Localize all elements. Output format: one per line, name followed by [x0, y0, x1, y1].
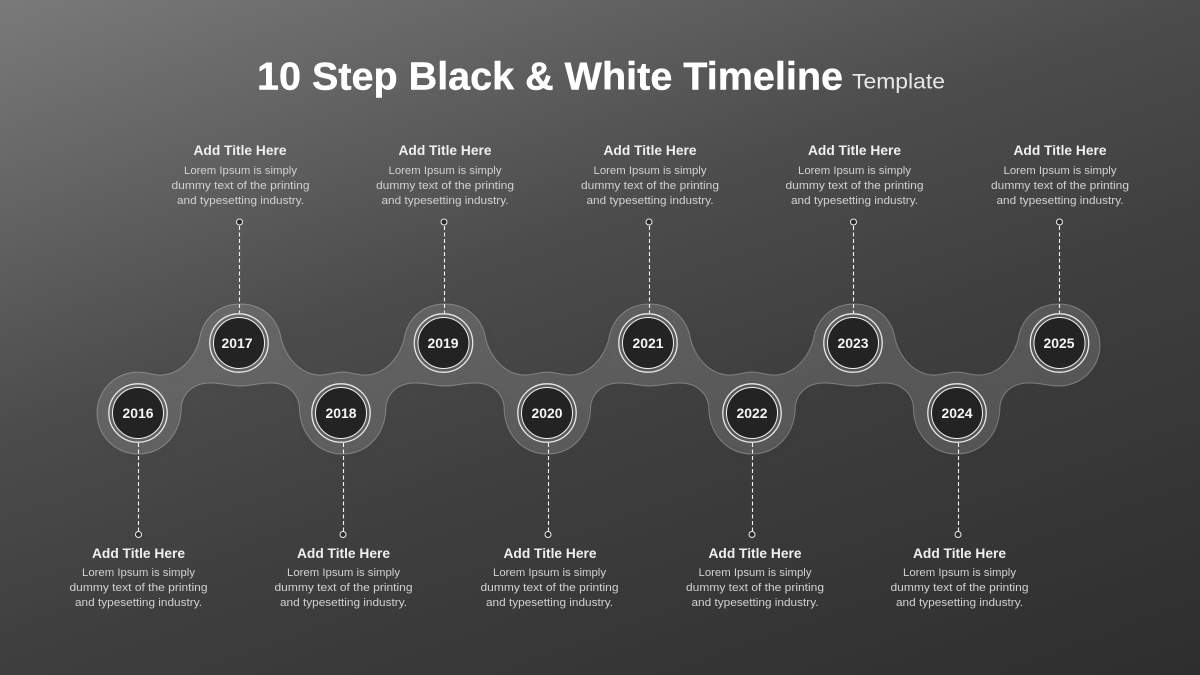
step: 2016: dummy text of the printing: [70, 582, 208, 594]
step: 2017: [172, 142, 310, 372]
step: 2023: [786, 142, 924, 372]
step: 2022: 2022: [736, 406, 768, 421]
step: 2020: and typesetting industry.: [486, 597, 613, 609]
step: 2021: Add Title Here: [604, 142, 697, 158]
step: 2025: [991, 142, 1129, 372]
step: 2019: Add Title Here: [398, 142, 492, 158]
step: 2019: 2019: [428, 336, 458, 351]
step: 2017: Lorem Ipsum is simply: [184, 165, 298, 177]
step: 2022: Add Title Here: [708, 545, 802, 561]
title: 10 Step Black & White Timeline: [257, 56, 843, 98]
step: 2019: and typesetting industry.: [382, 195, 508, 207]
step: 2019: [376, 142, 514, 372]
step: 2021: [581, 142, 719, 372]
step: 2025: and typesetting industry.: [996, 195, 1124, 207]
step: 2023: 2023: [838, 336, 869, 351]
step: 2016: 2016: [122, 406, 154, 421]
step: 2023: dummy text of the printing: [786, 180, 924, 192]
step: 2020: 2020: [532, 406, 562, 421]
timeline band: [97, 304, 1100, 454]
step: 2021: 2021: [632, 336, 664, 351]
step: 2017: Add Title Here: [194, 142, 287, 158]
step: 2018: dummy text of the printing: [274, 582, 412, 594]
step: 2019: dummy text of the printing: [376, 180, 514, 192]
step: 2016: Lorem Ipsum is simply: [82, 567, 196, 579]
step: 2024: Add Title Here: [913, 545, 1006, 561]
step: 2020: Lorem Ipsum is simply: [493, 567, 607, 579]
step: 2025: 2025: [1044, 336, 1075, 351]
step: 2021: and typesetting industry.: [586, 195, 714, 207]
step: 2022: [686, 384, 824, 609]
step: 2020: [480, 384, 618, 609]
step: 2024: dummy text of the printing: [890, 582, 1028, 594]
step: 2023: Add Title Here: [808, 142, 901, 158]
step: 2024: [890, 384, 1028, 609]
step: 2024: Lorem Ipsum is simply: [903, 567, 1017, 579]
step: 2018: [274, 384, 412, 609]
step: 2025: Add Title Here: [1014, 142, 1107, 158]
step: 2016: Add Title Here: [92, 545, 185, 561]
step: 2024: 2024: [942, 406, 973, 421]
step: 2019: Lorem Ipsum is simply: [388, 165, 502, 177]
step: 2021: Lorem Ipsum is simply: [594, 165, 707, 177]
step: 2025: Lorem Ipsum is simply: [1004, 165, 1117, 177]
step: 2017: and typesetting industry.: [177, 195, 304, 207]
step: 2018: 2018: [326, 406, 357, 421]
step: 2018: and typesetting industry.: [280, 597, 407, 609]
step: 2022: Lorem Ipsum is simply: [698, 567, 812, 579]
title: Template: [852, 70, 945, 94]
step: 2018: Lorem Ipsum is simply: [287, 567, 401, 579]
step: 2020: Add Title Here: [504, 545, 597, 561]
step: 2016: and typesetting industry.: [75, 597, 202, 609]
step: 2024: and typesetting industry.: [896, 597, 1023, 609]
step: 2022: dummy text of the printing: [686, 582, 824, 594]
step: 2018: Add Title Here: [297, 545, 390, 561]
step: 2021: dummy text of the printing: [581, 180, 719, 192]
step: 2023: and typesetting industry.: [791, 195, 918, 207]
step: 2017: dummy text of the printing: [172, 180, 310, 192]
step: 2025: dummy text of the printing: [991, 180, 1129, 192]
step: 2020: dummy text of the printing: [480, 582, 618, 594]
step: 2023: Lorem Ipsum is simply: [798, 165, 912, 177]
step: 2022: and typesetting industry.: [692, 597, 818, 609]
step: 2017: 2017: [222, 336, 252, 351]
step: 2016: [70, 384, 208, 609]
